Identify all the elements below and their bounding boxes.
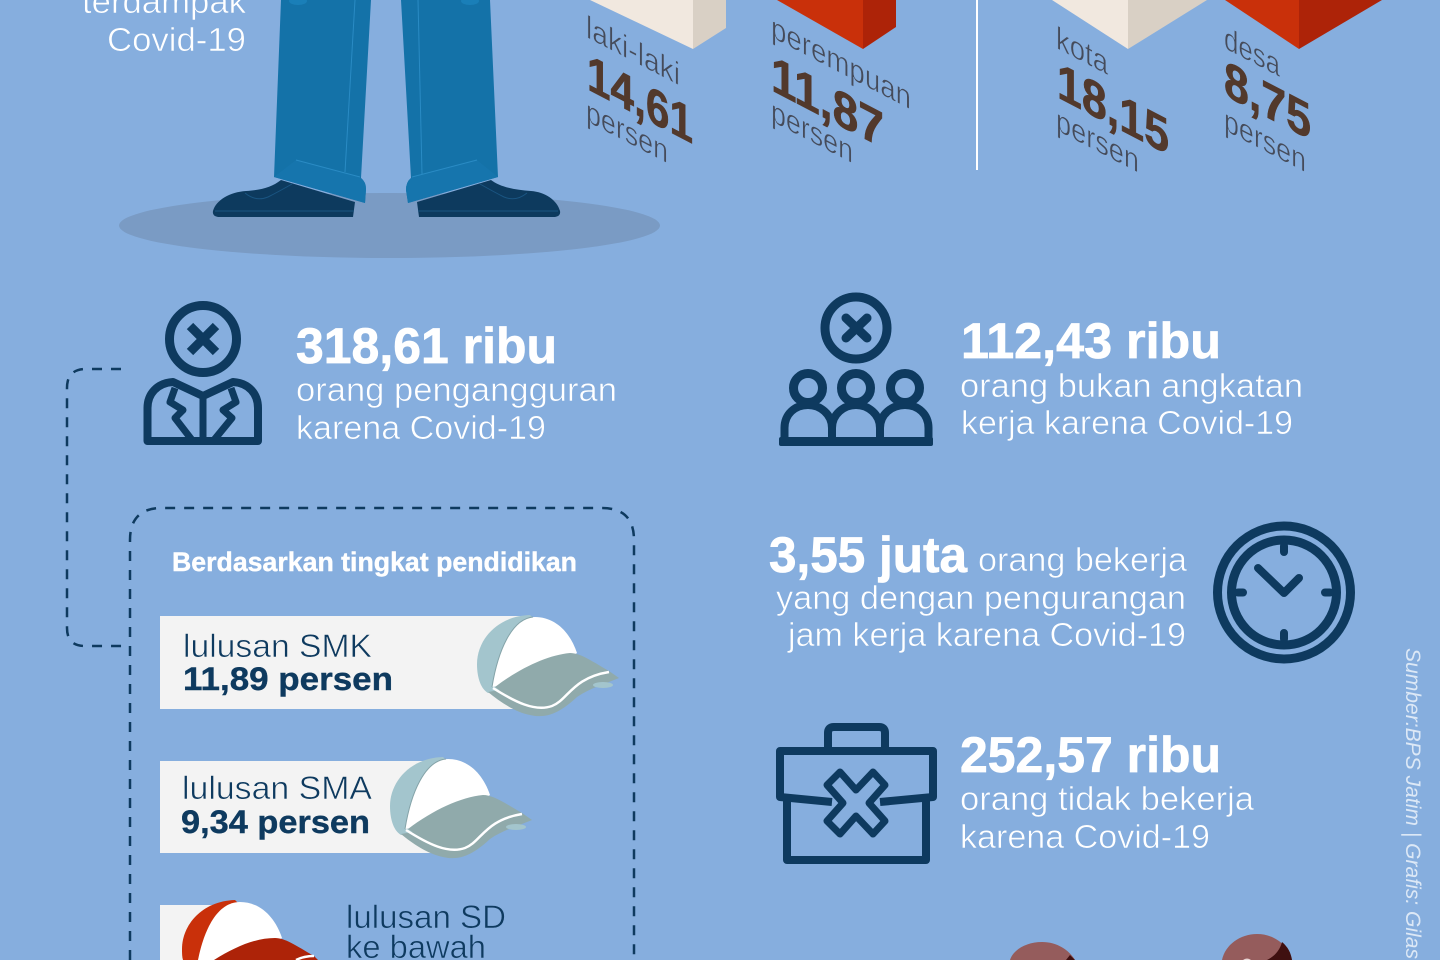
stat: 3,55 million reduced hours: orang bekerja bbox=[978, 541, 1188, 578]
bar: village bbox=[1225, 0, 1382, 49]
chart: men vs women isometric bars bbox=[586, 0, 911, 171]
right shoe bbox=[417, 180, 560, 217]
label: village 8,75 percent: persen bbox=[1224, 102, 1306, 180]
icon: briefcase with X bbox=[780, 727, 933, 860]
label: women 11,87 percent: perempuan bbox=[771, 9, 911, 117]
stat: 318,61 thousand unemployed: orang pengangguran bbox=[296, 371, 617, 408]
label: women 11,87 percent bbox=[771, 9, 911, 171]
label: village 8,75 percent bbox=[1224, 20, 1311, 180]
bar: SD graduates and below: lulusan SD bbox=[346, 899, 506, 935]
bar: SMK graduates: lulusan SMK bbox=[183, 628, 372, 664]
stat: 318,61 thousand unemployed bbox=[296, 318, 617, 446]
label: village 8,75 percent: desa bbox=[1224, 20, 1280, 85]
icon: grey cap SMA bbox=[390, 757, 532, 858]
chart: city vs village isometric bars bbox=[1052, 0, 1382, 181]
label: city 18,15 percent: persen bbox=[1056, 102, 1139, 181]
panel heading: Berdasarkan tingkat pendidikan bbox=[172, 547, 577, 577]
stat: 3,55 million reduced hours bbox=[769, 527, 1188, 653]
label: city 18,15 percent: kota bbox=[1056, 20, 1108, 83]
icon: group of people outside workforce bbox=[779, 297, 933, 446]
label: men 14,61 percent: 14,61 bbox=[587, 43, 693, 155]
stat: 3,55 million reduced hours: yang dengan pengurangan bbox=[776, 579, 1186, 616]
stat: 3,55 million reduced hours: 3,55 juta bbox=[769, 527, 968, 583]
label: city 18,15 percent: 18,15 bbox=[1057, 51, 1169, 167]
stat: 252,57 thousand not working: orang tidak bekerja bbox=[960, 780, 1255, 817]
left shoe bbox=[213, 180, 355, 217]
stat: 112,43 thousand outside workforce: orang bukan angkatan bbox=[960, 367, 1303, 404]
label: village 8,75 percent: 8,75 bbox=[1224, 49, 1311, 152]
stat: 318,61 thousand unemployed: 318,61 ribu bbox=[296, 318, 557, 374]
bar: city bbox=[1052, 0, 1207, 49]
label: men 14,61 percent bbox=[586, 9, 693, 171]
label: women 11,87 percent: 11,87 bbox=[771, 44, 884, 160]
bar: SMK graduates: 11,89 persen bbox=[183, 661, 393, 697]
bar: men bbox=[590, 0, 726, 49]
stat: 252,57 thousand not working: 252,57 ribu bbox=[960, 727, 1221, 783]
stat: 252,57 thousand not working bbox=[960, 727, 1255, 855]
right trouser leg bbox=[401, 0, 498, 203]
stat: 3,55 million reduced hours: jam kerja karena Covid-19 bbox=[787, 616, 1186, 653]
bar: women bbox=[777, 0, 896, 49]
stat: 252,57 thousand not working: karena Covid-19 bbox=[960, 818, 1210, 855]
illustration: standing man legs bbox=[119, 0, 660, 258]
bar: SMA graduates: lulusan SMA bbox=[182, 770, 373, 806]
icon: grey cap SMK bbox=[477, 615, 619, 716]
stat: 318,61 thousand unemployed: karena Covid-19 bbox=[296, 409, 546, 446]
text: affected by Covid-19: Covid-19 bbox=[107, 21, 246, 58]
ground shadow bbox=[119, 193, 660, 258]
panel: by education level bbox=[130, 508, 634, 960]
connector: dashed line to education panel bbox=[67, 369, 130, 646]
source credit: Sumber:BPS Jatim | Grafis: Gilas bbox=[1401, 648, 1424, 959]
icon: red cap SD bbox=[182, 900, 318, 960]
bar: SMA graduates bbox=[160, 761, 435, 853]
left trouser leg bbox=[274, 0, 371, 203]
bar: SD graduates and below bbox=[160, 899, 506, 960]
illustration: figures' heads at bottom edge bbox=[1010, 934, 1292, 960]
label: men 14,61 percent: laki-laki bbox=[586, 9, 680, 93]
label: women 11,87 percent: persen bbox=[771, 93, 853, 171]
stat: 112,43 thousand outside workforce: kerja karena Covid-19 bbox=[961, 404, 1293, 441]
icon: unemployed person bbox=[148, 306, 258, 441]
stat: 112,43 thousand outside workforce: 112,43 ribu bbox=[961, 313, 1221, 369]
label: men 14,61 percent: persen bbox=[586, 93, 668, 171]
bar: SMA graduates: 9,34 persen bbox=[181, 804, 370, 840]
bar: SMK graduates bbox=[160, 616, 525, 709]
label: city 18,15 percent bbox=[1056, 20, 1169, 181]
icon: clock bbox=[1218, 526, 1350, 659]
stat: 112,43 thousand outside workforce bbox=[960, 313, 1303, 441]
